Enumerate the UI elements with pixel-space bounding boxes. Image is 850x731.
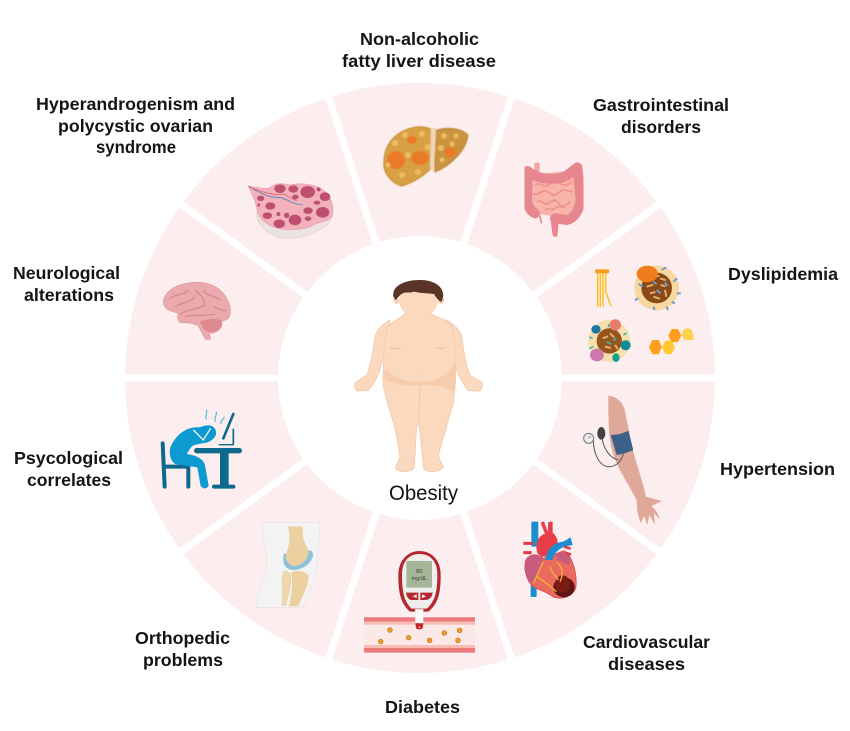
icon: lipoprotein, orange	[634, 266, 681, 310]
icon: obese body	[355, 280, 482, 472]
icon: brain	[163, 282, 230, 339]
label: cardiovascular diseases	[583, 632, 710, 674]
wheel of ten segments	[81, 45, 759, 711]
meter body: mg/dL	[411, 576, 427, 582]
icon: phospholipid	[595, 269, 611, 307]
icon: intestines	[527, 163, 581, 237]
panel: diabetes segment	[294, 490, 508, 711]
meter body: 80	[416, 569, 422, 575]
panel: hypertension segment	[537, 382, 715, 549]
panel: cardiovascular segment	[414, 450, 657, 689]
glucose particles	[378, 628, 462, 644]
icon: stressed person at desk	[163, 410, 239, 488]
label: diabetes: Diabetes	[385, 697, 460, 717]
label: non-alcoholic fatty liver disease	[342, 29, 496, 71]
label: gastrointestinal disorders	[593, 95, 729, 137]
label: cardiovascular diseases: Cardiovascular	[583, 632, 710, 652]
label: orthopedic problems	[135, 628, 230, 670]
icon: lipids and lipoproteins	[588, 266, 694, 362]
label: non-alcoholic fatty liver disease: fatty liver disease	[342, 51, 496, 71]
label: hyperandrogenism and polycystic ovarian syndrome: Hyperandrogenism and	[36, 94, 235, 114]
icon: glucose meter and vessel	[364, 551, 475, 653]
panel: fatty liver segment	[332, 45, 546, 266]
label: orthopedic problems: problems	[143, 650, 223, 670]
icon: arm with blood pressure cuff	[584, 396, 662, 525]
label: neurological alterations: alterations	[24, 285, 114, 305]
label: dyslipidemia: Dyslipidemia	[728, 264, 838, 284]
label: gastrointestinal disorders: Gastrointestinal	[593, 95, 729, 115]
icon: fatty liver	[384, 127, 468, 186]
icon: knee joint	[256, 523, 320, 607]
panel: neurological segment	[125, 207, 303, 374]
icon: polycystic ovary	[248, 184, 333, 238]
panel: hyperandrogenism segment	[183, 67, 426, 306]
icon: lipoprotein, multicolour	[588, 319, 631, 362]
panel: orthopedic segment	[167, 436, 381, 657]
label: cardiovascular diseases: diseases	[608, 654, 685, 674]
label: orthopedic problems: Orthopedic	[135, 628, 230, 648]
blood vessel	[364, 617, 475, 653]
label: psycological correlates	[14, 448, 123, 490]
label: hyperandrogenism and polycystic ovarian syndrome: syndrome	[96, 137, 176, 157]
label: psycological correlates: Psycological	[14, 448, 123, 468]
label: neurological alterations: Neurological	[13, 263, 120, 283]
icon: hexagon molecules	[649, 329, 694, 354]
label: gastrointestinal disorders: disorders	[621, 117, 701, 137]
label: hypertension: Hypertension	[720, 459, 835, 479]
label: non-alcoholic fatty liver disease: Non-alcoholic	[360, 29, 479, 49]
label: neurological alterations	[13, 263, 120, 305]
icon: heart with infarct	[523, 521, 576, 598]
label: psycological correlates: correlates	[27, 470, 111, 490]
panel: dyslipidemia segment	[517, 207, 759, 447]
label: hyperandrogenism and polycystic ovarian syndrome	[36, 94, 235, 157]
meter body	[398, 551, 441, 629]
panel: psycological segment	[81, 309, 323, 549]
panel: gastrointestinal segment	[459, 99, 673, 320]
label: hyperandrogenism and polycystic ovarian syndrome: polycystic ovarian	[58, 116, 213, 136]
center label: Obesity: Obesity	[389, 482, 458, 505]
